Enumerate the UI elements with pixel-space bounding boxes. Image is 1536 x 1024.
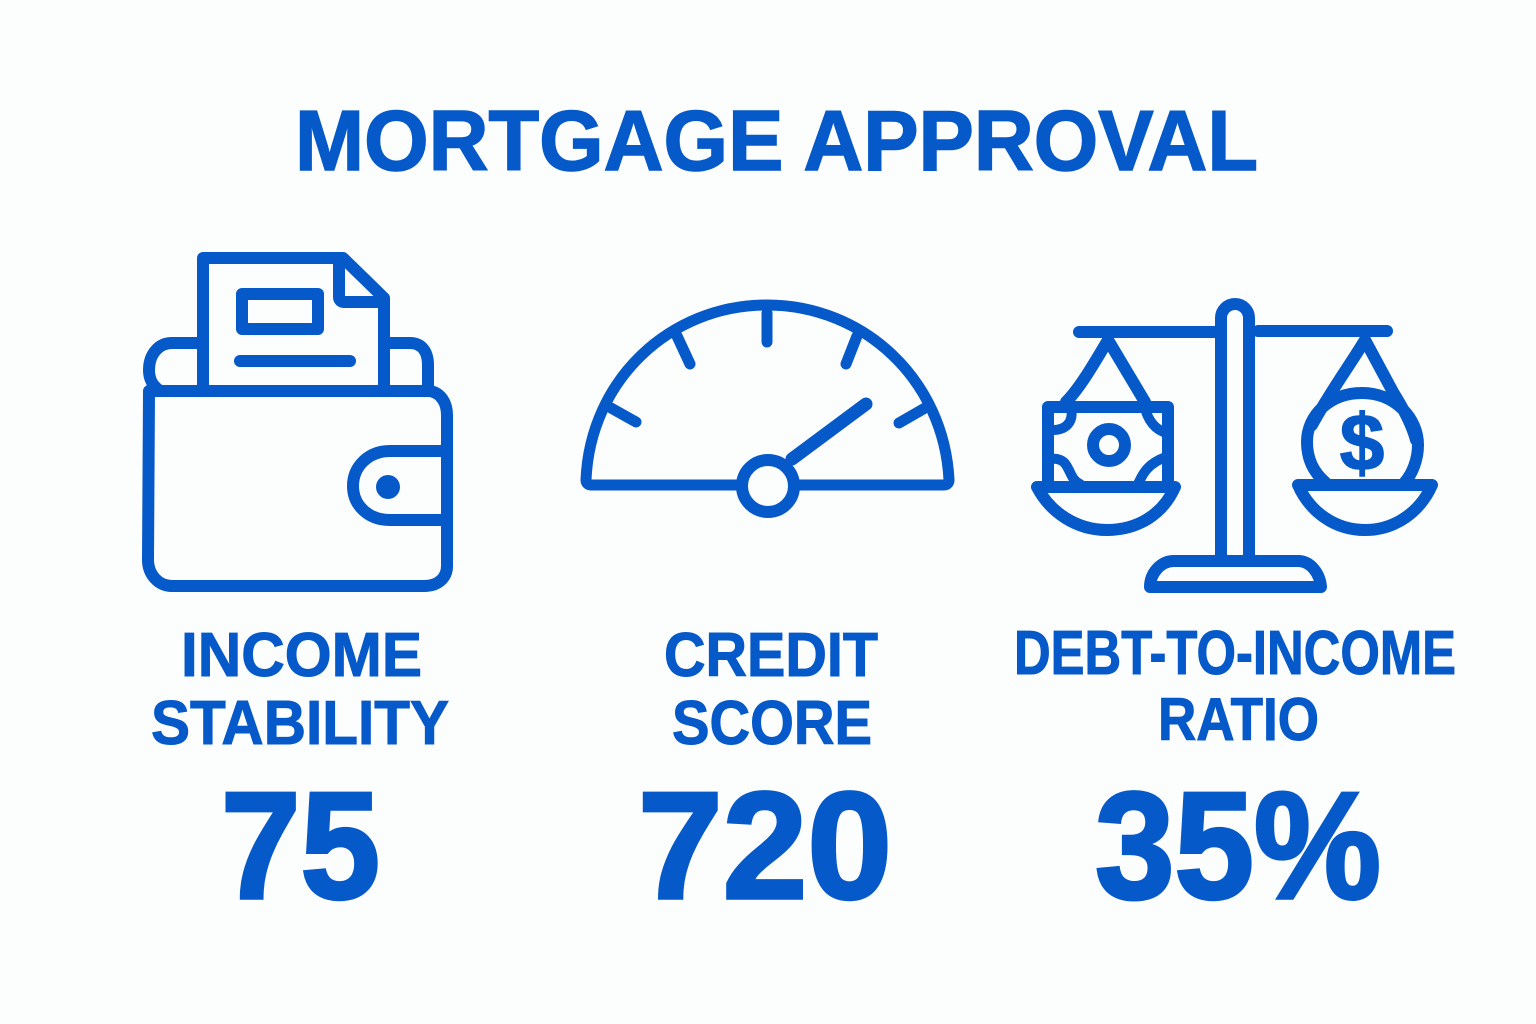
icon: dollar sign: $ [1340, 398, 1384, 487]
label: debt-to-income ratio [1014, 619, 1456, 753]
left hanger [1066, 340, 1145, 402]
coin [1307, 393, 1418, 482]
scale post [1221, 304, 1249, 558]
scale base [1150, 561, 1321, 587]
icon: wallet with document [148, 258, 447, 586]
document [203, 258, 384, 388]
gauge ticks [611, 313, 925, 423]
value: credit score: 720 [638, 761, 892, 931]
icon: credit score gauge [586, 305, 949, 512]
wallet clasp [353, 451, 441, 520]
label: income stability: STABILITY [151, 689, 449, 758]
wallet body [148, 391, 447, 586]
left pan [1037, 487, 1175, 530]
banknote [1048, 407, 1168, 487]
right hanger [1312, 340, 1416, 440]
gauge needle [792, 404, 866, 459]
gauge arc [586, 305, 949, 485]
gauge hub [742, 460, 794, 512]
label: credit score: SCORE [672, 689, 872, 758]
wallet top flap [149, 343, 428, 391]
icon: balance scale [1037, 304, 1432, 587]
label: income stability [151, 621, 449, 758]
banknote centre circle [1093, 429, 1125, 461]
label: income stability: INCOME [181, 621, 422, 690]
value: debt-to-income ratio: 35% [1095, 761, 1381, 931]
document field [242, 294, 318, 329]
document line [240, 355, 350, 367]
document fold [339, 262, 380, 302]
banknote outline [1048, 407, 1168, 487]
title: MORTGAGE APPROVAL [295, 94, 1258, 189]
scale beam [1079, 331, 1387, 332]
label: credit score [664, 621, 878, 758]
banknote corners [1050, 408, 1167, 484]
value: income stability: 75 [221, 761, 380, 931]
right pan [1298, 485, 1432, 530]
wallet clasp button [376, 475, 400, 499]
label: debt-to-income ratio: RATIO [1158, 686, 1319, 753]
label: credit score: CREDIT [664, 621, 878, 690]
